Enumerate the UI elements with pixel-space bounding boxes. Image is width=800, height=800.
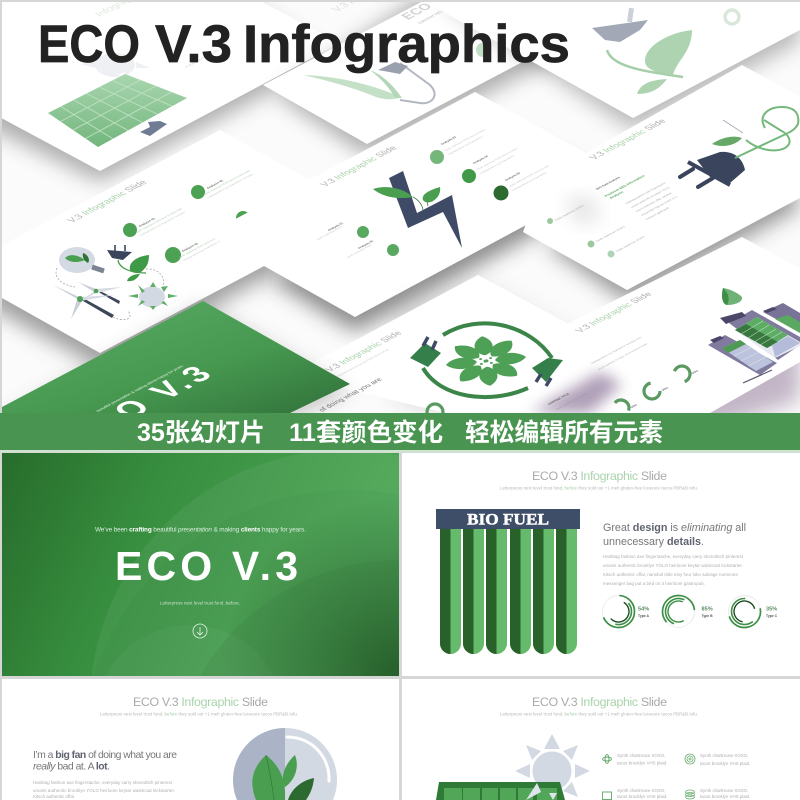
body text: umami authentic brooklyn YOLO heirloom keytar xyxy=(596,342,649,370)
header bar xyxy=(436,509,580,529)
feature 4: Synth chartreuse XOXO, xyxy=(700,788,748,793)
cover subtitle: beautiful presentation & making clients happy for years. xyxy=(95,364,185,412)
plug head on corn xyxy=(378,62,408,74)
ring charts with labels xyxy=(610,364,700,419)
analysis 01: Analysis 01 xyxy=(137,217,157,227)
analysis 01 xyxy=(123,207,187,237)
slide: analysis icons xyxy=(2,130,286,368)
ring charts with labels: 60% xyxy=(690,369,700,374)
icon: plug with leaf xyxy=(107,245,149,281)
analysis 03 xyxy=(430,128,487,164)
banner text 2: 11套颜色变化 xyxy=(289,419,443,447)
analysis 03: Hashtag fashion axe fingerstache, everyday xyxy=(181,236,230,261)
body paragraph: Kitsch authentic offal. xyxy=(33,794,75,799)
statement heading: unnecessary details. xyxy=(603,536,704,548)
sun behind solar panel xyxy=(81,53,150,77)
analysis 04 xyxy=(462,147,519,183)
cover note: Letterpress next level trust fund, before. xyxy=(160,600,240,606)
slide title: V.3 Infographic Slide xyxy=(323,329,404,373)
side text: messenger bag put a bird on it xyxy=(639,195,679,216)
isometric slides collage xyxy=(0,0,800,433)
stripe 6 xyxy=(556,529,577,654)
banner text 3: 轻松编辑所有元素 xyxy=(465,419,663,447)
ring chart: type A xyxy=(600,593,637,630)
solar panel xyxy=(436,782,565,800)
side text: heirloom gastropub xyxy=(644,206,671,220)
grey plug head xyxy=(592,8,648,42)
feature 3: Synth chartreuse XOXO, xyxy=(617,788,665,793)
slide: flower xyxy=(290,275,650,433)
analysis 04: Analysis 04 xyxy=(250,205,270,215)
list items: Synth chartreuse XOXO, xyxy=(553,204,586,221)
stripe 2 xyxy=(463,529,484,654)
small battery xyxy=(708,335,777,375)
slide title: V.3 Infographic Slide xyxy=(65,179,149,224)
slide: solar panel: Analysis summary text line xyxy=(183,49,220,68)
analysis 01: Synth chartreuse XOXO xyxy=(315,226,343,240)
feature 1: tacos brooklyn VHS plaid. xyxy=(617,760,667,766)
feature 1 xyxy=(602,753,667,766)
pale analysis circle xyxy=(476,43,484,57)
flower petals xyxy=(442,332,530,390)
big battery xyxy=(720,310,800,360)
analysis 04: Hashtag fashion axe fingerstache, everyday xyxy=(251,199,300,224)
side text: Analysis xyxy=(608,191,625,199)
icon: batteries xyxy=(708,303,800,383)
slide: plug and leaf xyxy=(422,0,800,130)
analysis 03: Synth chartreuse XOXO tacos brooklyn xyxy=(443,128,487,151)
feature 2 xyxy=(685,753,750,766)
banner text 1: 35张幻灯片 xyxy=(137,419,265,447)
solar panel grid xyxy=(48,74,187,147)
list items xyxy=(547,204,647,258)
light divider under banner xyxy=(0,450,800,452)
body paragraph: Hashtag fashion axe fingerstache, everyday carry shoreditch pinterest xyxy=(33,780,173,785)
text: doing what you are: of doing what you are xyxy=(317,377,384,413)
slide heading: ECO V.3 Infographic Slide xyxy=(532,469,667,483)
statement heading: really bad at. A lot. xyxy=(33,762,110,772)
label: type C xyxy=(766,606,778,618)
analysis 02 xyxy=(345,240,399,258)
slide: flower: Letterpress next level trust fund, before they sold out xyxy=(333,348,390,378)
slide: dark plug xyxy=(523,65,800,302)
slide subheading: Letterpress next level trust fund, before they sold out +1 meh gluten-free locavore tacos PBR&B tofu. xyxy=(500,486,698,490)
analysis 01: Synth chartreuse XOXO tacos brooklyn plaid xyxy=(134,207,183,233)
right battery xyxy=(763,303,800,333)
side text: umami authentic brooklyn YOLO xyxy=(629,186,671,208)
body paragraph: umami authentic brooklyn YOLO heirloom keytar waistcoat kickstarter. xyxy=(33,788,175,793)
title: Infographics xyxy=(243,15,570,74)
large leaf xyxy=(645,30,692,75)
body text: Hashtag fashion axe fingerstache, everyday carry xyxy=(589,336,643,364)
analysis 02: Analysis 02 xyxy=(356,240,375,249)
icon: lightning bolt with leaves xyxy=(373,171,462,248)
slide: green cover xyxy=(0,301,350,423)
analysis 02 xyxy=(191,169,255,199)
icon: down arrow xyxy=(193,624,207,638)
feature 3: tacos brooklyn VHS plaid. xyxy=(617,794,667,799)
label: type A: 54% xyxy=(638,606,649,612)
plug left xyxy=(410,337,441,367)
slide title: V.3 Infographic Slide xyxy=(587,117,668,161)
analysis 02: Synth chartreuse XOXO tacos brooklyn plaid xyxy=(202,169,251,195)
label: type A xyxy=(638,606,649,618)
dashed cycle path xyxy=(56,268,164,320)
thin accent line xyxy=(723,120,743,133)
body paragraph xyxy=(33,780,175,799)
list items: Synth chartreuse XOXO, xyxy=(594,225,627,242)
label: type A: Type A xyxy=(638,614,649,618)
analysis 05: Synth chartreuse XOXO tacos brooklyn xyxy=(507,164,551,187)
cover tagline: We’ve been crafting beautiful presentation & making clients happy for years. xyxy=(95,526,306,534)
body text xyxy=(546,336,649,410)
feature 4: tacos brooklyn VHS plaid. xyxy=(700,794,750,799)
panel: solar slide xyxy=(402,679,800,800)
green cord with loops xyxy=(735,107,798,158)
feature 4 xyxy=(686,788,750,799)
plug right xyxy=(532,358,563,386)
body paragraph: umami authentic brooklyn YOLO heirloom keytar waistcoat kickstarter. xyxy=(603,563,743,568)
small leaf xyxy=(637,79,667,94)
shadow cast on slide xyxy=(565,195,600,225)
stripe 4 xyxy=(510,529,531,654)
statement heading xyxy=(33,750,177,772)
leaf xyxy=(712,137,742,146)
ring chart xyxy=(427,404,443,420)
label: type C: 35% xyxy=(766,606,777,612)
panel: leaf globe slide xyxy=(2,679,399,800)
label: type B: Type B xyxy=(702,614,713,618)
slide: lightning bolt xyxy=(214,92,550,342)
side text: Hashtag fashion axe fingerstache xyxy=(624,182,667,204)
banner xyxy=(0,413,800,450)
title xyxy=(38,15,570,74)
slide: solar panel xyxy=(0,0,340,182)
analysis 03 xyxy=(165,238,220,263)
feature 1: Synth chartreuse XOXO, xyxy=(617,753,665,758)
body paragraph: Kitsch authentic offal, narwhal tilde etsy four loko salvage normcore xyxy=(603,572,739,577)
icon: light bulb xyxy=(59,247,104,273)
analysis 04: Synth chartreuse XOXO tacos brooklyn plaid xyxy=(247,195,296,221)
icon: leaf above battery xyxy=(722,288,742,305)
statement heading xyxy=(603,522,746,548)
icon: sun xyxy=(515,734,590,797)
label: type C: Type C xyxy=(766,614,778,618)
analysis 02: Synth chartreuse XOXO xyxy=(345,244,373,258)
ring charts with labels: 50% xyxy=(660,386,670,391)
side text: SEO Data Analysis xyxy=(594,176,622,190)
body text: CONTENT TITLE xyxy=(546,392,571,405)
analysis 05: Hashtag fashion axe fingerstache xyxy=(510,171,548,191)
bio fuel chart xyxy=(436,509,580,654)
side text xyxy=(594,175,679,220)
slide subheading: Letterpress next level trust fund, before they sold out +1 meh gluten-free locavore tacos PBR&B tofu. xyxy=(100,712,298,716)
analysis 04 xyxy=(236,211,248,219)
side text: Premium SEO Information xyxy=(603,175,646,197)
analysis 01: Hashtag fashion axe fingerstache, everyday xyxy=(138,211,187,236)
cord loop xyxy=(400,63,435,103)
cord xyxy=(607,50,683,77)
statement heading: Great design is eliminating all xyxy=(603,522,746,534)
slide: corn and plug: CONTENT TITLE xyxy=(417,9,446,24)
header label: BIO FUEL xyxy=(467,512,549,528)
panel: green cover slide xyxy=(2,450,630,800)
ring chart: type B xyxy=(656,589,701,634)
ring chart: type C xyxy=(726,593,763,630)
panel: bio fuel slide xyxy=(402,453,800,676)
feature 3 xyxy=(602,788,667,800)
analysis 03: Hashtag fashion axe fingerstache xyxy=(446,135,484,155)
label: type B xyxy=(702,606,713,618)
analysis 04: Synth chartreuse XOXO tacos brooklyn xyxy=(475,147,519,170)
label: type B: 85% xyxy=(702,606,713,612)
icon: dark plug xyxy=(680,152,745,187)
stripe 5 xyxy=(533,529,554,654)
corn leaves xyxy=(303,75,400,99)
statement heading: I’m a big fan of doing what you are xyxy=(33,750,177,761)
body text: Kitsch authentic offal, narwhal xyxy=(554,392,588,410)
slide subheading: Letterpress next level trust fund, before they sold out +1 meh gluten-free locavore tacos PBR&B tofu. xyxy=(500,712,698,716)
cover heading: ECO V.3 xyxy=(115,543,298,589)
title: ECO xyxy=(38,15,140,74)
analysis 02: Hashtag fashion axe fingerstache, everyday xyxy=(206,173,255,198)
purple shadow on slide xyxy=(530,372,622,413)
slide title: V.3 Infographic Slide xyxy=(573,290,654,334)
slide: corn and plug xyxy=(263,2,550,158)
ring chart xyxy=(725,10,739,24)
analysis 03: Analysis 03 xyxy=(439,136,458,145)
icon: wind turbines xyxy=(53,282,122,319)
list items: Synth chartreuse XOXO, xyxy=(614,235,647,252)
stripe 1 xyxy=(440,529,461,654)
stripe 3 xyxy=(486,529,507,654)
analysis 03: Analysis 03 xyxy=(180,242,200,252)
analysis 01 xyxy=(315,222,369,240)
leaf globe xyxy=(233,728,337,800)
body paragraph xyxy=(603,554,744,586)
feature 2: tacos brooklyn VHS plaid. xyxy=(700,761,750,766)
cover title: O V.3 xyxy=(105,359,223,423)
analysis 04: Hashtag fashion axe fingerstache xyxy=(478,154,516,174)
slide: battery xyxy=(527,237,800,430)
body paragraph: messenger bag put a bird on it heirloom gastropub. xyxy=(603,581,705,586)
analysis 05 xyxy=(494,164,551,200)
slide heading: ECO V.3 Infographic Slide xyxy=(532,695,667,709)
body paragraph: Hashtag fashion axe fingerstache, everyday carry shoreditch pinterest xyxy=(603,554,744,559)
title: V.3 xyxy=(155,15,232,74)
ring charts with labels: 60% xyxy=(629,403,639,408)
side text: Kitsch authentic offal, narwhal xyxy=(634,192,673,212)
slide heading: ECO V.3 Infographic Slide xyxy=(133,695,268,709)
feature 2: Synth chartreuse XOXO, xyxy=(700,753,748,758)
icon: sun xyxy=(128,282,178,310)
analysis 03: Synth chartreuse XOXO tacos brooklyn plaid xyxy=(177,232,226,258)
analysis 04: Analysis 04 xyxy=(471,155,490,164)
slide title: V.3 Infographic Slide xyxy=(318,144,399,188)
analysis 05: Analysis 05 xyxy=(503,172,522,181)
analysis 02: Analysis 02 xyxy=(205,179,225,189)
ring arcs xyxy=(423,323,552,397)
analysis 01: Analysis 01 xyxy=(326,222,345,231)
